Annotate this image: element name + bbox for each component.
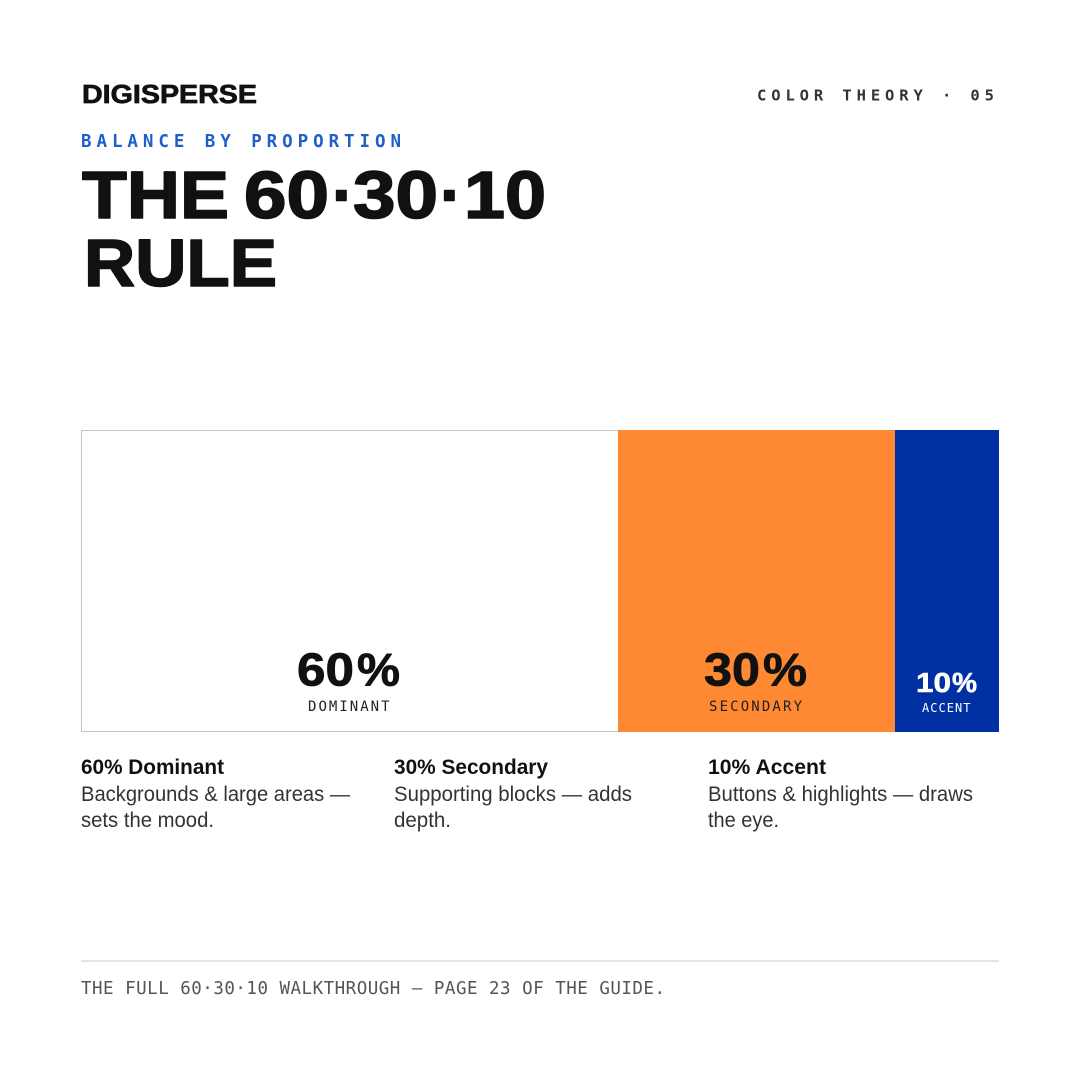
title: 60 [244, 158, 329, 233]
legend: 30% secondary [394, 756, 632, 832]
legend: 30% secondary: Supporting blocks — adds [394, 783, 632, 806]
legend: 60% dominant: sets the mood. [81, 809, 214, 832]
proportion bar chart [82, 430, 999, 732]
segment: 30% secondary: 30 [704, 644, 760, 696]
segment: 60% dominant: DOMINANT [308, 699, 390, 715]
title [82, 158, 546, 301]
segment: 60% dominant: % [357, 644, 400, 696]
legend: 10% accent: Buttons & highlights — draws [708, 783, 973, 806]
title: 10 [464, 158, 546, 233]
segment: 30% secondary: SECONDARY [709, 699, 803, 715]
legend: 10% accent: 10% Accent [708, 756, 826, 779]
segment: 10% accent: ACCENT [922, 701, 970, 715]
footer note: THE FULL 60·30·10 WALKTHROUGH — PAGE 23 OF THE GUIDE. [81, 979, 665, 999]
eyebrow: BALANCE BY PROPORTION [81, 132, 401, 152]
title: RULE [84, 226, 277, 301]
segment: 60% dominant: 60 [297, 644, 354, 696]
segment: 10% accent: 10 [916, 667, 951, 698]
title: THE [82, 158, 229, 233]
title: · [332, 158, 354, 233]
legend: 30% secondary: depth. [394, 809, 451, 832]
series label: COLOR THEORY · 05 [757, 86, 994, 104]
segment: 10% accent [895, 430, 999, 732]
legend: 60% dominant: 60% Dominant [81, 756, 224, 779]
legend: 60% dominant [81, 756, 350, 832]
segment: 30% secondary: % [763, 644, 807, 696]
legend: 30% secondary: 30% Secondary [394, 756, 548, 779]
brand wordmark: DIGISPERSE [82, 81, 257, 109]
title: 30 [353, 158, 438, 233]
title: · [440, 158, 462, 233]
segment: 10% accent: % [952, 667, 977, 698]
segment: 60% dominant [82, 430, 998, 732]
legend: 10% accent: the eye. [708, 809, 779, 832]
legend: 60% dominant: Backgrounds & large areas — [81, 783, 350, 806]
segment: 30% secondary [618, 430, 895, 732]
legend: 10% accent [708, 756, 973, 832]
